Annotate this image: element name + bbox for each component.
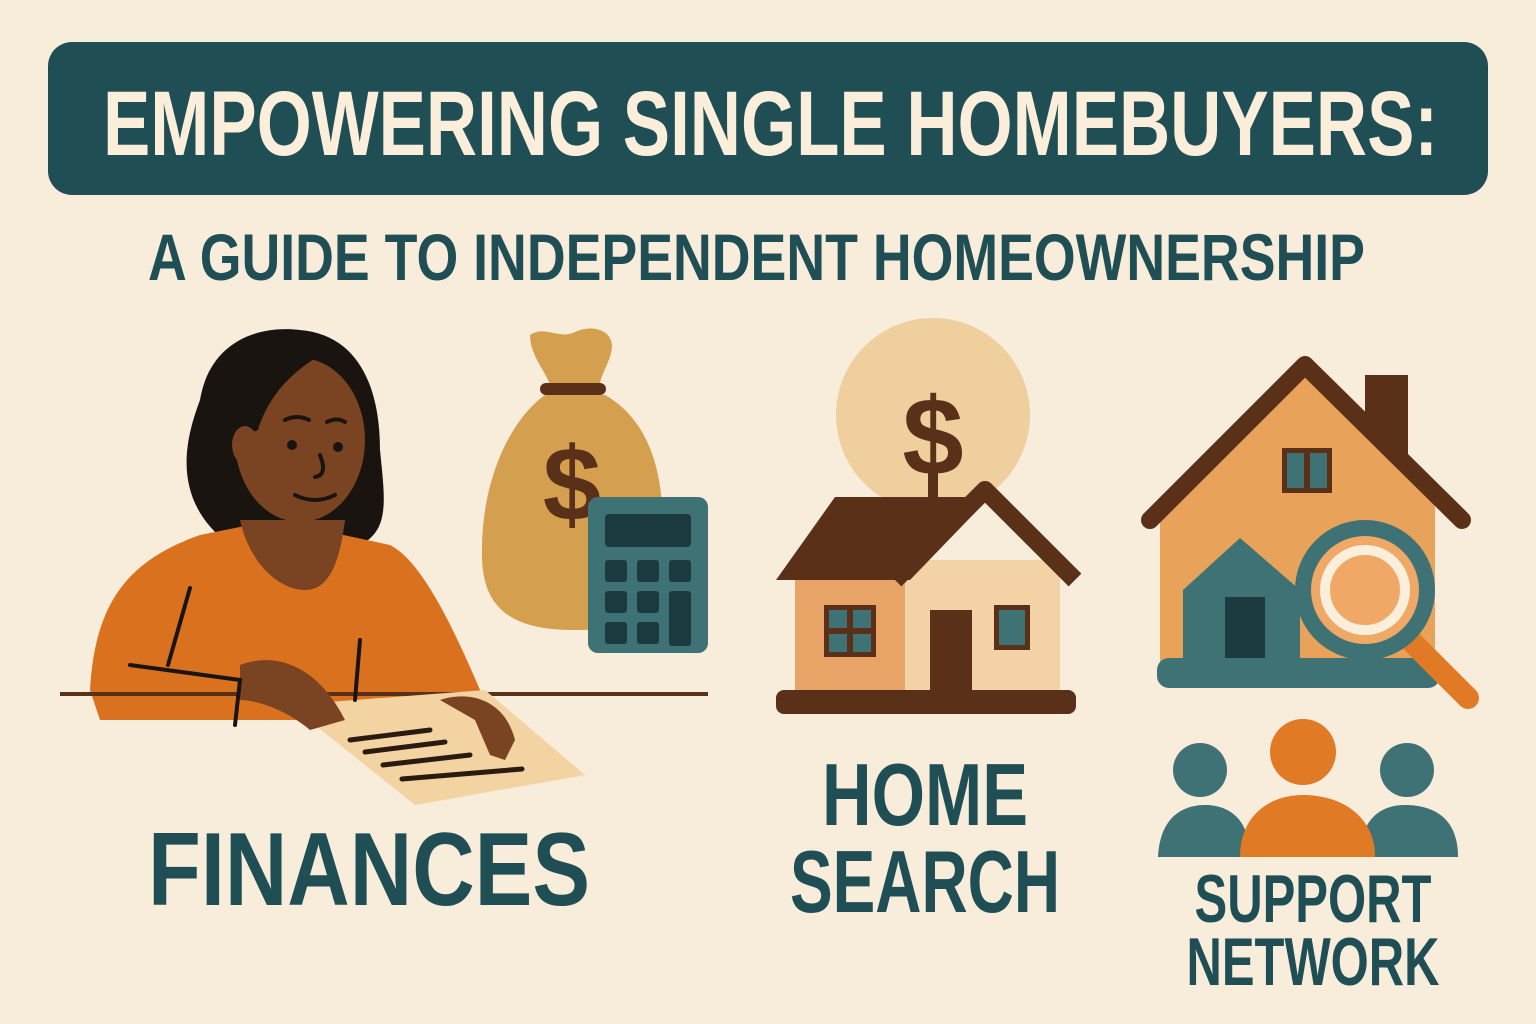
- heading: finances: FINANCES: [148, 812, 590, 928]
- illustration: house with dollar: $: [902, 376, 964, 499]
- icon: support network people: [1158, 719, 1458, 857]
- heading: home search: [790, 745, 1060, 931]
- icon: money bag: [482, 328, 663, 630]
- icon: money bag: $: [543, 426, 601, 543]
- illustration: house with dollar: [776, 318, 1076, 714]
- heading: home search: SEARCH: [790, 832, 1060, 931]
- heading: support network: SUPPORT: [1194, 861, 1432, 937]
- illustration: woman at desk: [60, 329, 708, 805]
- illustration: house with magnifier: [1150, 365, 1468, 698]
- title banner: [48, 42, 1488, 195]
- icon: calculator: [588, 497, 708, 653]
- heading: support network: [1186, 861, 1440, 1000]
- heading: support network: NETWORK: [1186, 924, 1440, 1000]
- heading: home search: HOME: [822, 745, 1028, 844]
